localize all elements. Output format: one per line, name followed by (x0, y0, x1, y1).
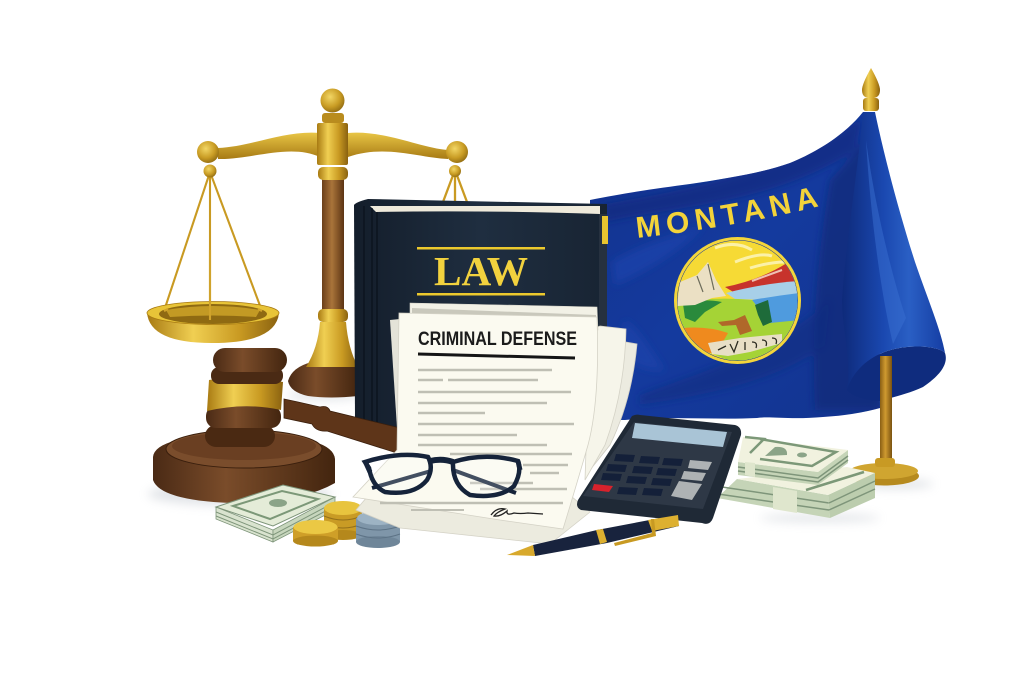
flag folds (600, 118, 880, 410)
calculator body (577, 415, 741, 524)
sound block (153, 430, 335, 503)
calculator red key (592, 484, 613, 492)
scale right hanger (443, 165, 467, 202)
glasses left lens (365, 455, 431, 493)
glasses right lens (453, 457, 519, 496)
scale left ball (197, 141, 219, 163)
book title: LAW (434, 248, 528, 294)
book pages top (370, 206, 600, 214)
bill portrait (765, 447, 787, 456)
left cash stack (216, 485, 335, 542)
law book (354, 199, 608, 430)
eyeglasses (365, 455, 520, 496)
scales of justice (147, 88, 468, 398)
bottom paper sheets (356, 470, 590, 544)
scale rod (322, 168, 344, 313)
lower stack paper band (773, 487, 797, 513)
upper stack (738, 437, 848, 485)
document body lines (380, 370, 574, 503)
scale lower collar (318, 309, 348, 322)
glasses bridge (430, 460, 453, 462)
flag fold underside (847, 347, 946, 401)
criminal defense papers (353, 303, 637, 544)
lower stack right side (828, 473, 875, 518)
seal dark trees (683, 300, 722, 322)
glasses temples (372, 470, 516, 493)
document short line (411, 509, 464, 511)
scale column collar (317, 113, 348, 180)
pole base (849, 458, 919, 486)
seal tree (755, 300, 772, 326)
right cash stacks (717, 437, 875, 518)
rear page (410, 303, 598, 330)
Montana flag (590, 112, 946, 458)
book spine lines (364, 206, 377, 428)
lower stack left side (717, 479, 830, 518)
gold stack front (293, 520, 338, 546)
flag title: MONTANA (636, 188, 818, 238)
seal sky clouds (715, 244, 785, 268)
seal plough (718, 315, 752, 335)
left back page (390, 318, 410, 440)
gavel upper rings (211, 367, 283, 384)
signature (491, 509, 543, 516)
document underline (418, 354, 575, 358)
scale wooden base (288, 362, 358, 398)
flag main field (590, 112, 880, 420)
scale bell foot (306, 322, 358, 367)
calculator screen (632, 423, 727, 447)
upper stack paper band (745, 462, 755, 477)
gavel (153, 348, 400, 503)
seal mountains (677, 262, 726, 306)
pen barrel (533, 515, 679, 556)
calculator face (583, 422, 732, 509)
coin stacks (293, 501, 400, 548)
book right band (599, 214, 607, 428)
scale left pan strings (164, 164, 262, 320)
seal scrawled motto (718, 338, 776, 352)
right back pages (590, 340, 637, 470)
silver blue stack (356, 511, 400, 548)
state seal (674, 237, 801, 365)
scale right ball (446, 141, 468, 163)
seal pale water (726, 281, 800, 300)
calculator grey keys (671, 460, 712, 500)
scale beam (218, 133, 448, 159)
seal green land (678, 298, 794, 360)
front page (353, 313, 598, 529)
flag front fold (842, 112, 945, 390)
pen (507, 515, 679, 556)
seal orange ground (683, 328, 728, 354)
book cover (354, 199, 607, 430)
scale left pan (147, 250, 279, 343)
book top rule (417, 247, 545, 250)
scale top ball (320, 88, 344, 112)
gold stack back (324, 501, 362, 540)
pen clip (614, 519, 656, 546)
book bottom rule (417, 293, 545, 296)
book yellow tab (602, 216, 608, 244)
bill portrait (269, 499, 287, 507)
seal red clouds (725, 264, 795, 292)
calculator keys (601, 454, 683, 496)
gavel lower rings (205, 425, 275, 447)
document title: CRIMINAL DEFENSE (418, 328, 577, 350)
seal rocks (708, 334, 782, 356)
gavel collar (207, 377, 283, 411)
pen nib (507, 545, 535, 556)
lower stack top face (737, 467, 875, 495)
calculator (577, 415, 741, 524)
flag fold highlight (866, 140, 906, 344)
pen gold bands (596, 515, 679, 544)
illustration: Montana criminal defense legal costs (146, 68, 946, 556)
seal lake (752, 293, 800, 324)
flag pole (849, 68, 919, 486)
pole finial (862, 68, 880, 111)
lower stack (717, 467, 875, 518)
gavel handle (284, 399, 400, 454)
ground shadows (148, 390, 933, 522)
gavel head (205, 348, 287, 447)
pole rod (880, 356, 892, 462)
